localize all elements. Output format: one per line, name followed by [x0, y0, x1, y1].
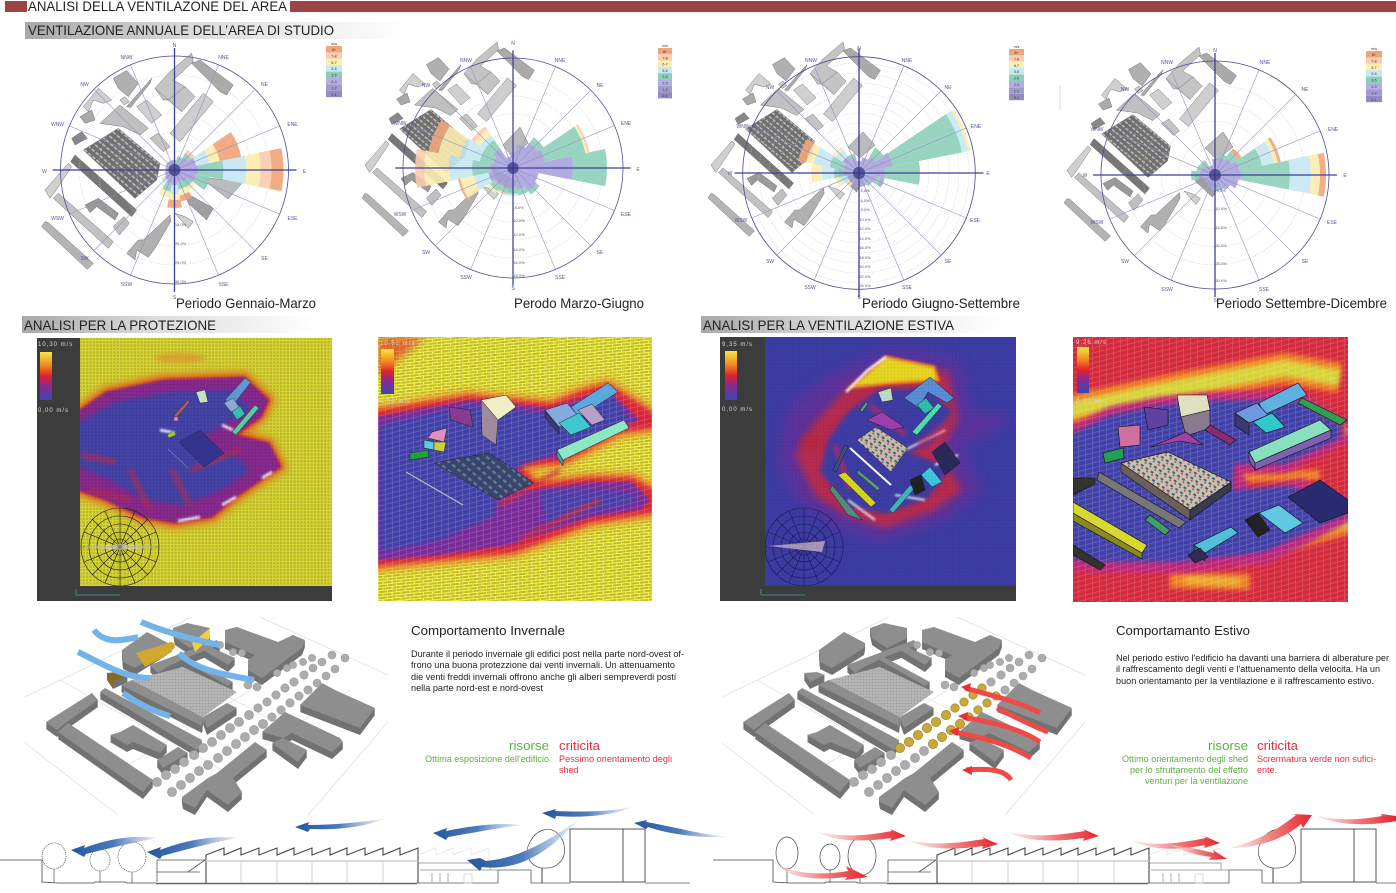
direction labels: N [1213, 48, 1217, 54]
direction labels: 18.0% [859, 255, 871, 260]
blue wind streams [71, 807, 726, 871]
direction labels: NE [945, 85, 952, 91]
caption: Gennaio-Marzo: Periodo Gennaio-Marzo [176, 295, 316, 311]
direction labels: 20.0% [859, 264, 871, 269]
direction labels: SSW [804, 285, 816, 291]
direction labels: SSW [1161, 287, 1173, 293]
site buildings [406, 383, 629, 505]
viewport chrome: 0,00 m/s [38, 408, 69, 414]
direction labels: 24.0% [859, 283, 871, 288]
legend: Settembre-Dicembre: 6-7 [1371, 66, 1377, 70]
direction labels: 5.0% [1216, 188, 1226, 193]
legend: Marzo-Giugno: 0-1 [662, 94, 668, 98]
summer resources and criticalities: Scrermatura verde non sufici- [1257, 754, 1376, 764]
direction labels: 6.0% [860, 198, 870, 203]
3D site diagram: winter [25, 617, 388, 815]
direction labels: E [303, 169, 307, 175]
site buildings [830, 377, 960, 520]
colour scale: 10,52 m/s [380, 341, 415, 347]
legend: Giugno-Settembre: 7-8 [1014, 57, 1019, 61]
direction labels: ENE [1328, 127, 1339, 133]
direction labels: WNW [51, 122, 64, 128]
direction labels: 10.0% [1215, 206, 1227, 211]
wind rose: Giugno-Settembre [703, 17, 1015, 329]
legend: Gennaio-Marzo: 7-8 [331, 54, 337, 58]
direction labels: SW [80, 256, 89, 262]
legend: Settembre-Dicembre: 3-5 [1371, 79, 1377, 83]
direction labels: 20.0% [1215, 243, 1227, 248]
legend: Gennaio-Marzo: 0-1 [331, 93, 337, 97]
direction labels: S [857, 295, 861, 301]
section: summer [713, 814, 1396, 884]
direction labels: SSE [1259, 287, 1270, 293]
caption: Giugno-Settembre: Periodo Giugno-Settembre [862, 295, 1020, 311]
legend: Giugno-Settembre: 5-6 [1014, 70, 1019, 74]
legend: Gennaio-Marzo: 5-6 [331, 67, 337, 71]
heading: annual ventilation: VENTILAZIONE ANNUALE DELL’AREA DI STUDIO [28, 22, 334, 38]
direction labels: WSW [51, 216, 64, 222]
legend: Gennaio-Marzo: 8+ [332, 48, 336, 52]
direction labels: SE [597, 250, 604, 256]
direction labels: 8.0% [860, 207, 870, 212]
direction labels: WNW [393, 121, 407, 127]
direction labels: 30.0% [1215, 278, 1227, 283]
heading: summer ventilation analysis: ANALISI PER LA VENTILAZIONE ESTIVA [703, 317, 955, 333]
summer resources and criticalities: venturi per la ventilazione [1145, 776, 1248, 786]
text: winter behaviour: nella parte nord-est e nord-ovest [411, 683, 543, 694]
direction labels: SSE [218, 282, 229, 288]
viewport chrome: 9,35 m/s [722, 342, 753, 348]
heading: protection analysis [22, 316, 317, 333]
direction labels: SW [1121, 259, 1129, 265]
text: winter behaviour: Durante il periodo invernale gli edifici post nella parte nord-ovest of- [411, 649, 684, 660]
winter resources and criticalities: risorse [509, 738, 549, 753]
summer resources and criticalities [1122, 738, 1376, 786]
direction labels: W [1083, 173, 1088, 179]
summer resources and criticalities: per lo sfruttamento del effetto [1130, 765, 1248, 775]
legend: Marzo-Giugno: 7-8 [662, 56, 668, 60]
direction labels: NW [422, 83, 430, 89]
direction labels: ESE [287, 216, 298, 222]
direction labels: 30.0% [175, 279, 187, 284]
summer resources and criticalities: risorse [1208, 738, 1248, 753]
direction labels: W [42, 169, 47, 175]
wind rose overlay [81, 508, 159, 586]
direction labels: NNW [1161, 60, 1173, 66]
viewport chrome: 10,30 m/s [38, 342, 73, 348]
direction labels: 16.0% [513, 260, 525, 265]
text: winter behaviour [411, 623, 684, 694]
direction labels: SW [766, 259, 774, 265]
direction labels: SW [422, 250, 430, 256]
text: summer behaviour: Nel periodo estivo l'edificio ha davanti una barriera di alberature per [1116, 653, 1389, 664]
direction labels: WNW [736, 124, 750, 130]
legend: Gennaio-Marzo: 2-3 [331, 80, 337, 84]
caption: Settembre-Dicembre: Periodo Settembre-Dicembre [1216, 295, 1387, 311]
colour scale: 9,26 m/s [1076, 340, 1107, 346]
colour scale: 0,00 m/s [1076, 399, 1107, 405]
legend: Marzo-Giugno: 6-7 [662, 63, 668, 67]
direction labels: 8.0% [514, 205, 524, 210]
legend: Giugno-Settembre: 2-3 [1014, 83, 1019, 87]
direction labels: 15.0% [1215, 225, 1227, 230]
direction labels: ENE [287, 122, 298, 128]
site buildings [1073, 383, 1348, 570]
direction labels: E [986, 171, 990, 177]
red wind arrows [954, 688, 1048, 780]
direction labels: NNE [218, 55, 229, 61]
legend: Giugno-Settembre: 0-1 [1014, 96, 1019, 100]
direction labels: 20.0% [175, 241, 187, 246]
direction labels: NE [597, 83, 604, 89]
direction labels: E [636, 167, 640, 173]
winter resources and criticalities: Pessimo orientamento degli [559, 754, 672, 764]
direction labels: NNW [460, 58, 472, 64]
legend: Settembre-Dicembre [1366, 47, 1382, 102]
direction labels: WSW [1091, 220, 1104, 226]
site buildings [167, 378, 259, 468]
direction labels: 10.0% [513, 218, 525, 223]
direction labels: S [1213, 298, 1217, 304]
legend: Marzo-Giugno: 3-5 [662, 75, 668, 79]
direction labels: SE [261, 256, 268, 262]
direction labels: 25.0% [1215, 261, 1227, 266]
legend: Marzo-Giugno: 1-2 [662, 88, 668, 92]
direction labels: WSW [735, 218, 748, 224]
direction labels: WSW [394, 212, 407, 218]
direction labels: ENE [621, 121, 632, 127]
direction labels: 10.0% [859, 217, 871, 222]
yellow sheltering buildings [107, 628, 210, 688]
direction labels: NE [1302, 87, 1309, 93]
legend: Giugno-Settembre: 8+ [1014, 51, 1019, 55]
CFD panel: summer perspective [1060, 337, 1350, 602]
red wind streams [775, 814, 1396, 880]
viewport chrome [720, 337, 1016, 601]
legend: Settembre-Dicembre: 8+ [1372, 53, 1376, 57]
blue wind arrows [78, 622, 254, 716]
direction labels: SSW [121, 282, 132, 288]
section: winter [0, 807, 726, 884]
direction labels: NW [80, 82, 89, 88]
legend: Gennaio-Marzo: 3-5 [331, 74, 337, 78]
heading: protection analysis: ANALISI PER LA PROTEZIONE [24, 317, 216, 333]
legend: Settembre-Dicembre: m/s [1371, 47, 1377, 51]
legend: Giugno-Settembre: 1-2 [1014, 89, 1019, 93]
direction labels: S [173, 295, 177, 301]
direction labels: S [511, 286, 515, 292]
viewport chrome: 0,00 m/s [722, 407, 753, 413]
direction labels: 14.0% [859, 236, 871, 241]
caption: Marzo-Giugno: Perodo Marzo-Giugno [514, 295, 644, 311]
direction labels: WNW [1090, 127, 1104, 133]
direction labels: N [173, 43, 177, 49]
text: winter behaviour: frono una buona protezzione dai venti invernali. Un attenuamento [411, 660, 675, 671]
text: winter behaviour: Comportamento Invernale [411, 623, 565, 638]
section trees [42, 842, 146, 883]
colour scale [380, 341, 415, 405]
text: summer behaviour: buon orientamanto per la ventilazione e il raffrescamento estivo. [1116, 676, 1374, 687]
legend: Gennaio-Marzo: 1-2 [331, 86, 337, 90]
winter resources and criticalities: shed [559, 765, 579, 775]
direction labels: N [857, 46, 861, 52]
text: summer behaviour: Comportamanto Estivo [1116, 623, 1250, 638]
3D site diagram: summer [722, 617, 1085, 815]
direction labels: 12.0% [859, 226, 871, 231]
winter resources and criticalities [425, 738, 672, 775]
wind rose overlay [765, 508, 843, 586]
direction labels: NNE [1260, 60, 1271, 66]
legend: Gennaio-Marzo [326, 42, 342, 97]
text: summer behaviour: il raffrescamento degli venti e l'attuenamento della velocita. Ha un [1116, 664, 1380, 675]
direction labels: NNE [555, 58, 566, 64]
direction labels: NNW [805, 58, 817, 64]
direction labels: 4.0% [860, 188, 870, 193]
direction labels: ENE [971, 124, 982, 130]
CFD panel: winter perspective [360, 337, 660, 601]
summer resources and criticalities: criticita [1257, 738, 1299, 753]
header bar [5, 0, 1396, 14]
direction labels: NE [261, 82, 269, 88]
direction labels [42, 43, 307, 301]
direction labels [728, 46, 990, 301]
direction labels: SE [945, 259, 952, 265]
CFD panel: winter plan view [37, 338, 332, 601]
colour scale: 0,00 m/s [380, 399, 411, 405]
legend: Gennaio-Marzo: m/s [331, 42, 337, 46]
direction labels: SSE [902, 285, 913, 291]
direction labels: 12.0% [513, 232, 525, 237]
direction labels [1083, 48, 1347, 304]
direction labels: W [728, 171, 733, 177]
direction labels: 25.0% [175, 260, 187, 265]
text: winter behaviour: die venti freddi invernali offrono anche gli alberi sempreverdi posti [411, 672, 676, 683]
direction labels: SSE [555, 275, 566, 281]
highlighted tree rows [895, 684, 1000, 753]
wind rose: Gennaio-Marzo [42, 43, 307, 301]
summer resources and criticalities: ente. [1257, 765, 1277, 775]
legend: Settembre-Dicembre: 7-8 [1371, 59, 1377, 63]
direction labels: SE [1302, 259, 1309, 265]
legend: Marzo-Giugno: 8+ [663, 50, 667, 54]
legend: Settembre-Dicembre: 2-3 [1371, 85, 1377, 89]
legend: Settembre-Dicembre: 5-6 [1371, 72, 1377, 76]
legend: Giugno-Settembre [1009, 45, 1024, 100]
direction labels: ESE [1327, 220, 1338, 226]
wind rose: Settembre-Dicembre [1060, 47, 1347, 304]
legend: Marzo-Giugno: m/s [662, 44, 668, 48]
direction labels: ESE [621, 212, 632, 218]
winter resources and criticalities: Ottima esposizione dell'edificio [425, 754, 549, 764]
legend: Giugno-Settembre: 3-5 [1014, 77, 1019, 81]
wind rose: Marzo-Giugno [362, 41, 640, 292]
direction labels: E [1343, 173, 1347, 179]
direction labels: 18.0% [513, 273, 525, 278]
text: summer behaviour [1116, 623, 1389, 687]
legend: Marzo-Giugno: 5-6 [662, 69, 668, 73]
direction labels: SSW [460, 275, 472, 281]
winter resources and criticalities: criticita [559, 738, 601, 753]
direction labels: ESE [970, 218, 981, 224]
legend: Settembre-Dicembre: 0-1 [1371, 98, 1377, 102]
direction labels: NW [1121, 87, 1129, 93]
colour scale [1076, 340, 1107, 405]
direction labels: 14.0% [513, 247, 525, 252]
section trees [776, 837, 876, 883]
legend: Settembre-Dicembre: 1-2 [1371, 91, 1377, 95]
direction labels: 22.0% [859, 274, 871, 279]
direction labels: NW [766, 85, 774, 91]
summer resources and criticalities: Ottimo orientamento degli shed [1122, 754, 1248, 764]
legend: Giugno-Settembre: 6-7 [1014, 64, 1019, 68]
viewport chrome [37, 338, 332, 601]
legend: Gennaio-Marzo: 6-7 [331, 61, 337, 65]
direction labels: 16.0% [859, 245, 871, 250]
legend: Marzo-Giugno: 2-3 [662, 82, 668, 86]
red arrowheads [949, 683, 972, 775]
direction labels [393, 41, 640, 292]
direction labels: N [511, 41, 515, 47]
direction labels: NNW [121, 55, 133, 61]
legend: Giugno-Settembre: m/s [1014, 45, 1020, 49]
legend: Marzo-Giugno [658, 44, 672, 98]
direction labels: 15.0% [175, 222, 187, 227]
direction labels: NNE [902, 58, 913, 64]
CFD panel: summer plan view [720, 337, 1016, 601]
